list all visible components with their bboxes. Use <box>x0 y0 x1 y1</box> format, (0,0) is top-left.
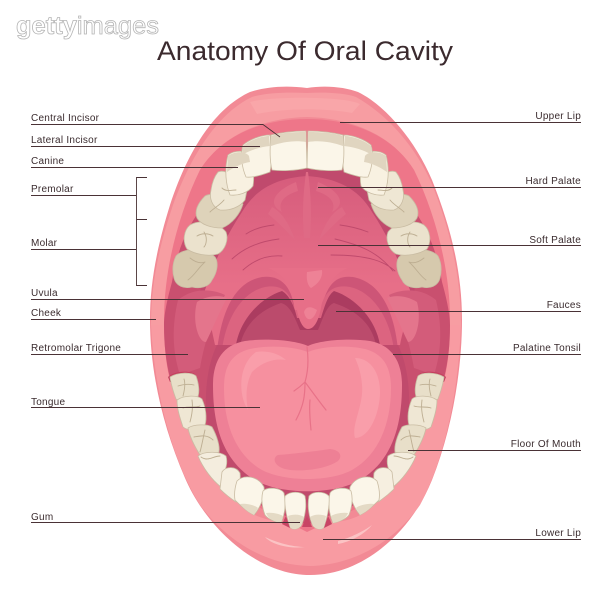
label: tongue: Tongue <box>31 397 65 408</box>
label: fauces: Fauces <box>547 300 581 311</box>
central incisor <box>270 131 307 171</box>
premolar 2 <box>196 194 243 228</box>
lower teeth left <box>168 372 306 529</box>
hard palate edge <box>200 165 415 292</box>
upper lip center sheen <box>250 98 360 114</box>
label: upper lip: Upper Lip <box>535 111 581 122</box>
throat back <box>236 291 380 345</box>
label: molar <box>31 238 136 250</box>
watermark: gettyimages: gettyimages <box>16 12 159 40</box>
palate <box>174 165 440 375</box>
uvula highlight <box>304 270 322 319</box>
molar b <box>177 396 206 430</box>
lower teeth right <box>308 372 446 529</box>
gum shade on front teeth <box>227 132 306 172</box>
tongue <box>213 340 402 491</box>
right cheek pillars <box>389 290 440 375</box>
molar c <box>188 425 219 456</box>
premolar d <box>198 452 227 487</box>
central h <box>285 492 306 529</box>
tongue center groove <box>294 347 326 430</box>
canine f <box>235 477 264 515</box>
label: cheek <box>31 308 156 320</box>
label: floor of mouth: Floor Of Mouth <box>511 439 581 450</box>
palate creases <box>232 225 395 271</box>
throat inner shade <box>240 303 376 345</box>
label: soft palate: Soft Palate <box>529 235 581 246</box>
cavity <box>164 155 450 525</box>
lateral g <box>262 488 285 523</box>
label: cheek: Cheek <box>31 308 62 319</box>
right arch outer <box>319 277 398 350</box>
labels left <box>31 113 304 523</box>
hard palate <box>205 176 410 345</box>
upper teeth right <box>307 131 441 288</box>
cheek pillars <box>174 290 225 375</box>
upper lip highlight <box>151 93 461 325</box>
label: canine: Canine <box>31 156 64 167</box>
bracket: premolar and molar <box>136 178 147 286</box>
lateral incisor <box>242 135 272 177</box>
throat middle <box>222 286 394 350</box>
label: lower lip: Lower Lip <box>535 528 581 539</box>
label: central incisor <box>31 113 280 137</box>
tongue shade <box>206 345 409 506</box>
labels right <box>318 111 581 540</box>
label: hard palate: Hard Palate <box>525 176 581 187</box>
lower lip sheen <box>265 525 372 548</box>
tongue body <box>213 340 402 491</box>
tongue highlights <box>241 352 380 438</box>
label: retromolar trigone: Retromolar Trigone <box>31 343 121 354</box>
label: gum: Gum <box>31 512 53 523</box>
label: central incisor: Central Incisor <box>31 113 100 124</box>
illustration: open mouth <box>150 87 462 575</box>
gum tip <box>168 372 195 382</box>
tongue middle <box>224 347 391 479</box>
palatal folds <box>268 172 346 240</box>
lower lip body <box>151 325 461 566</box>
right pillar light <box>387 296 419 342</box>
molar a <box>170 373 199 402</box>
molar 2 <box>173 250 217 288</box>
molar fissures <box>178 379 220 459</box>
molar 1 <box>184 222 227 255</box>
left arch outer <box>217 277 297 350</box>
molar fissures <box>188 188 236 280</box>
canine <box>226 151 254 195</box>
tooth base shade <box>240 504 304 529</box>
tongue tip patch <box>275 449 340 470</box>
premolar e <box>220 468 240 502</box>
title: Anatomy Of Oral Cavity <box>157 36 454 66</box>
gum band <box>164 119 450 532</box>
label: uvula: Uvula <box>31 288 58 299</box>
upper teeth left <box>173 131 307 288</box>
label: molar: Molar <box>31 238 58 249</box>
label: premolar: Premolar <box>31 184 74 195</box>
outer lips <box>150 87 462 575</box>
left pillar light <box>195 296 227 342</box>
label: lateral incisor: Lateral Incisor <box>31 135 98 146</box>
uvula <box>268 268 348 329</box>
gum between lower incisors <box>282 516 332 528</box>
premolar 1 <box>210 171 247 210</box>
label: palatine tonsil: Palatine Tonsil <box>513 343 581 354</box>
label: premolar <box>31 184 136 196</box>
